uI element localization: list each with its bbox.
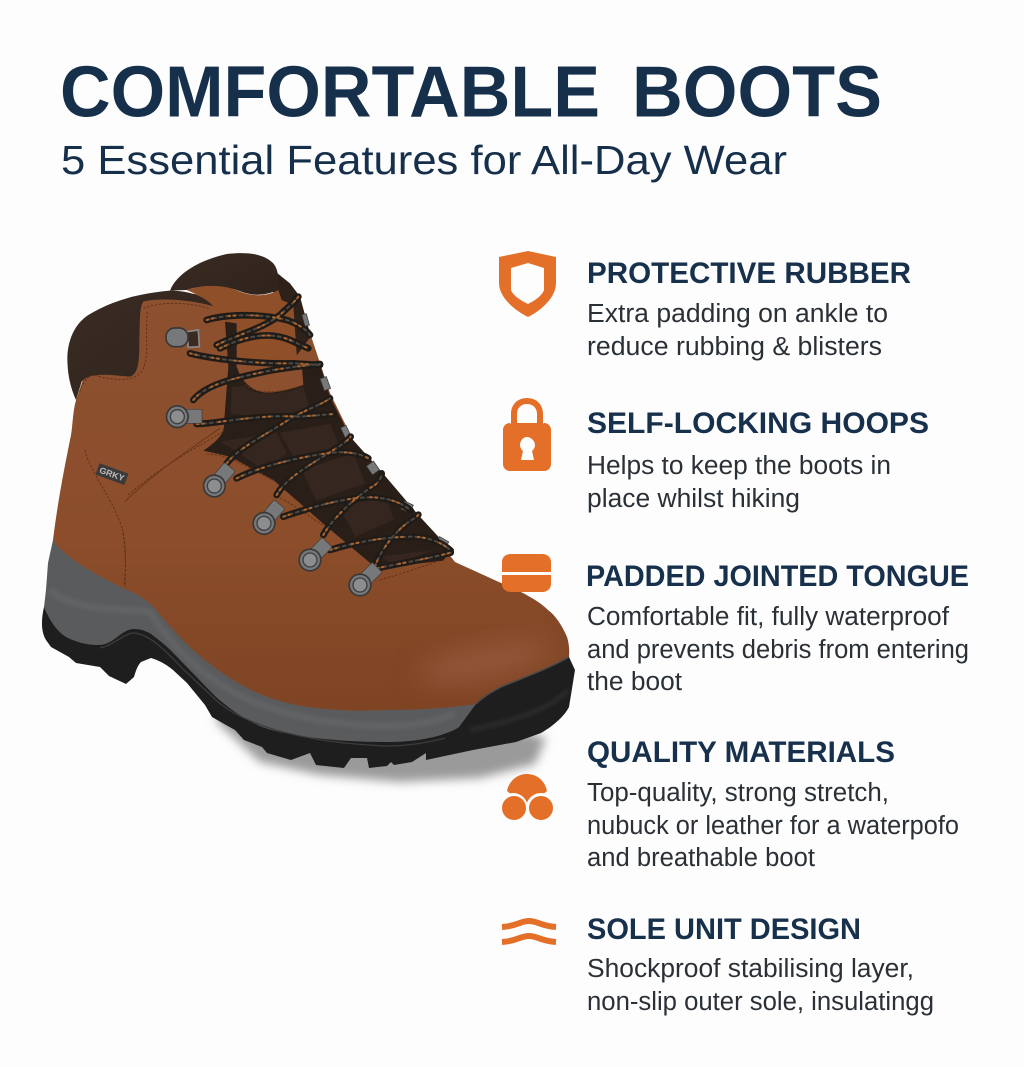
- eyelets: [166, 405, 386, 601]
- toe highlight: [430, 640, 540, 686]
- illustration: hiking boot: [42, 253, 575, 782]
- heading: QUALITY MATERIALS: [587, 736, 895, 769]
- feature 1: protective rubber: [499, 251, 911, 361]
- brand tag: GRKY: [98, 465, 126, 483]
- body text: [587, 452, 891, 513]
- tongue padded panels: [220, 387, 433, 565]
- body text: and breathable boot: [587, 844, 815, 872]
- body text: Comfortable fit, fully waterproof: [587, 603, 950, 631]
- tongue: [203, 322, 451, 568]
- body text: [587, 300, 888, 361]
- feature 5: sole unit design: [502, 913, 934, 1016]
- body text: Top-quality, strong stretch,: [587, 779, 889, 807]
- title: [60, 52, 882, 132]
- boot outsole with tread: [42, 607, 575, 768]
- icon: waves: [502, 921, 556, 942]
- feature 4: quality materials: [498, 736, 959, 872]
- brand tag: [96, 463, 128, 485]
- top collar padding: [170, 253, 278, 295]
- lace grey weave: [190, 297, 451, 568]
- body text: [587, 779, 959, 872]
- top eyelet ring: [166, 328, 199, 347]
- ankle stitching: [79, 303, 437, 587]
- midsole bottom groove: [100, 633, 445, 746]
- subtitle: 5 Essential Features for All-Day Wear: [61, 137, 787, 183]
- boot upper leather: [53, 293, 569, 711]
- collar lining: [187, 286, 297, 363]
- feature 3: padded jointed tongue: [502, 554, 969, 696]
- body text: [587, 955, 934, 1016]
- icon: padded tongue: [502, 554, 551, 592]
- heading: SELF-LOCKING HOOPS: [587, 407, 929, 440]
- icon: shield: [499, 251, 556, 317]
- body text: [587, 603, 969, 696]
- body text: nubuck or leather for a waterpofo: [587, 812, 959, 840]
- heading: PADDED JOINTED TONGUE: [586, 560, 969, 593]
- icon: three material shapes: [498, 774, 556, 823]
- rand edge highlight: [476, 657, 569, 704]
- title: BOOTS: [632, 52, 882, 132]
- ankle padding: [67, 291, 214, 400]
- midsole: [44, 540, 476, 742]
- title: COMFORTABLE: [60, 52, 600, 132]
- body text: the boot: [587, 668, 682, 696]
- forefoot stitching: [123, 533, 125, 586]
- quarter seam: [125, 428, 220, 502]
- body text: Extra padding on ankle to: [587, 300, 888, 328]
- body text: reduce rubbing & blisters: [587, 333, 882, 361]
- laces base: [190, 297, 451, 568]
- body text: place whilst hiking: [587, 485, 800, 513]
- body text: Shockproof stabilising layer,: [587, 955, 914, 983]
- heading: SOLE UNIT DESIGN: [587, 913, 861, 946]
- sole highlight: [470, 690, 568, 730]
- body text: and prevents debris from entering: [587, 636, 969, 664]
- hidden eyelets on far side: [302, 314, 449, 549]
- lace orange flecks: [190, 297, 451, 568]
- body text: non-slip outer sole, insulatingg: [587, 988, 934, 1016]
- upper details: padding, tongue, laces, eyelets: [67, 253, 451, 601]
- rear tongue padding: [273, 270, 311, 360]
- feature 2: self-locking hoops: [503, 398, 929, 513]
- boot ground shadow: [215, 680, 546, 782]
- icon: padlock: [503, 398, 551, 471]
- midsole lighter band: [50, 590, 455, 726]
- body text: Helps to keep the boots in: [587, 452, 891, 480]
- heading: PROTECTIVE RUBBER: [587, 257, 911, 290]
